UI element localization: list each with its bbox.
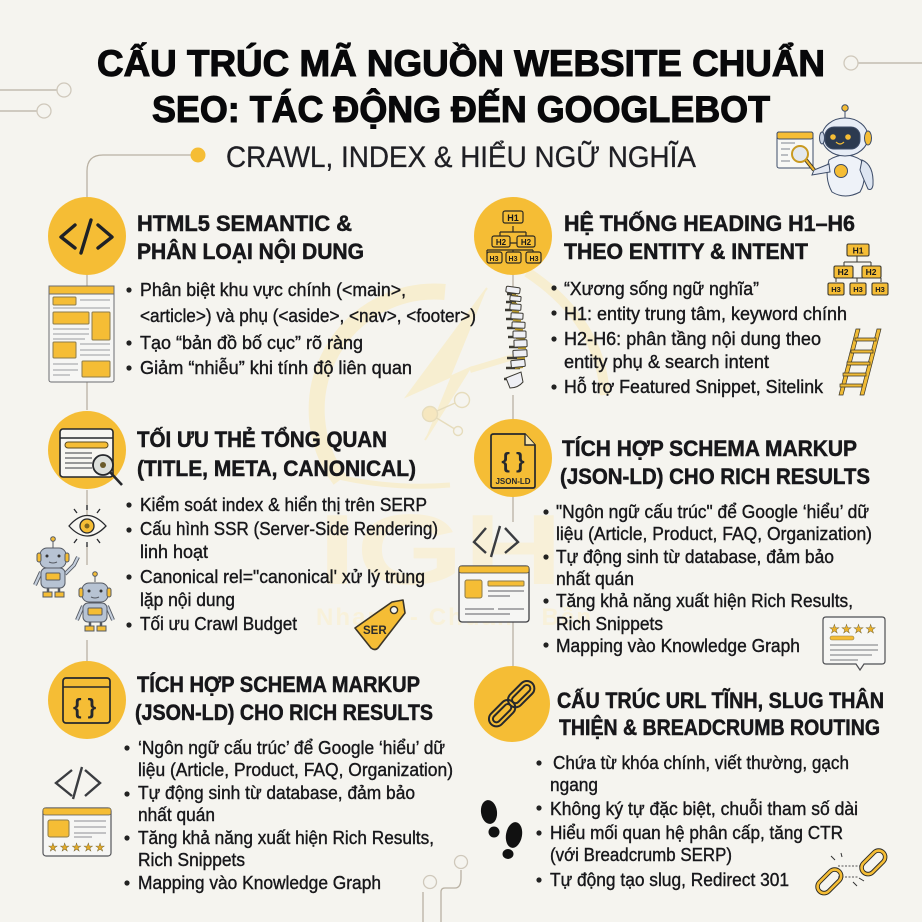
icon: heading tree small: H2 [838, 267, 849, 277]
icon: JSON-LD file circle [474, 419, 552, 497]
bullet list: (với Breadcrumb SERP) [550, 845, 732, 865]
panel: heading system [474, 197, 888, 397]
bullet list: ngang [550, 775, 598, 795]
heading: (JSON-LD) CHO RICH RESULTS [135, 700, 433, 725]
icon: heading tree circle [474, 197, 552, 275]
bullet list: liệu (Article, Product, FAQ, Organization) [556, 524, 872, 544]
icon: heading tree small: H3 [875, 285, 885, 294]
illustration: browser layout [459, 566, 529, 622]
illustration: review card [43, 808, 111, 856]
bullet list: nhất quán [556, 569, 634, 589]
title: CẤU TRÚC MÃ NGUỒN WEBSITE CHUẨN [97, 42, 825, 84]
bullet list: Tự động tạo slug, Redirect 301 [550, 870, 789, 890]
heading [135, 672, 433, 725]
icon: browser braces circle: { } [73, 694, 97, 719]
bullet list: Tạo “bản đồ bố cục” rõ ràng [140, 333, 363, 353]
icon: ladder [839, 329, 881, 395]
heading [564, 210, 855, 264]
icon: eye [69, 505, 106, 547]
heading: HỆ THỐNG HEADING H1–H6 [564, 210, 855, 236]
icon: heading tree small: H3 [853, 285, 863, 294]
bullet list [126, 280, 476, 378]
bullet list: Hiểu mối quan hệ phân cấp, tăng CTR [550, 823, 843, 843]
bullet list: H2-H6: phân tầng nội dung theo [564, 329, 821, 349]
heading: HTML5 SEMANTIC & [137, 211, 352, 236]
subtitle: CRAWL, INDEX & HIỂU NGỮ NGHĨA [226, 140, 696, 174]
bullet list [551, 279, 847, 397]
icon: code tag [474, 526, 518, 557]
bullet list: Không ký tự đặc biệt, chuỗi tham số dài [550, 798, 858, 819]
heading: TỐI ƯU THẺ TỔNG QUAN [137, 426, 387, 452]
icon: heading tree circle: H3 [509, 256, 518, 263]
icon: SER price tag: SER [363, 625, 387, 637]
icon: broken chain [815, 848, 888, 896]
icon: heading tree circle: H3 [490, 256, 499, 263]
bullet list: liệu (Article, Product, FAQ, Organization) [138, 760, 453, 780]
bullet list: ‘Ngôn ngữ cấu trúc’ để Google ‘hiểu’ dữ [138, 738, 445, 758]
bullet list: Mapping vào Knowledge Graph [556, 636, 800, 656]
heading: THIỆN & BREADCRUMB ROUTING [559, 715, 880, 740]
icon: browser with magnifier circle [48, 411, 126, 489]
bullet list [543, 502, 872, 656]
icon: robot with magnifier [777, 105, 873, 196]
watermark logo [316, 272, 605, 631]
heading: THEO ENTITY & INTENT [564, 239, 809, 264]
bullet list: “Xương sống ngữ nghĩa” [564, 279, 759, 299]
bullet list: lặp nội dung [140, 590, 235, 610]
icon: heading tree small: H2 [866, 267, 877, 277]
watermark logo: IGH [318, 494, 563, 606]
bullet list: Canonical rel="canonical' xử lý trùng [140, 567, 425, 587]
bullet list: Hỗ trợ Featured Snippet, Sitelink [564, 376, 824, 397]
icon: heading tree small [828, 244, 888, 295]
icon: review speech bubble [823, 617, 885, 670]
bullet list: Kiểm soát index & hiển thị trên SERP [140, 495, 427, 515]
bullet list: Tăng khả năng xuất hiện Rich Results, [556, 591, 853, 611]
icon: robot waving [35, 537, 78, 597]
bullet list: Giảm “nhiễu” khi tính độ liên quan [140, 357, 412, 378]
icon: SER price tag [355, 600, 405, 650]
icon: code tag [56, 767, 100, 799]
icon: heading tree circle: H2 [521, 238, 532, 247]
icon: heading tree circle: H2 [496, 238, 507, 247]
bullet list: Rich Snippets [138, 850, 245, 870]
heading: CẤU TRÚC URL TĨNH, SLUG THÂN [557, 688, 884, 713]
icon: spine [504, 286, 527, 388]
bullet list: Chứa từ khóa chính, viết thường, gạch [553, 753, 849, 773]
panel: HTML5 semantic [48, 197, 476, 382]
illustration: review card: ★★★★★ [48, 842, 105, 854]
bullet list [126, 495, 438, 634]
icon: code tag circle [48, 197, 126, 275]
icon: JSON-LD file circle: JSON-LD [495, 477, 531, 486]
heading: (JSON-LD) CHO RICH RESULTS [560, 464, 870, 489]
panel: schema markup right [459, 419, 885, 670]
icon: robot standing [77, 572, 113, 631]
bullet list: <article>) và phụ (<aside>, <nav>, <footer>) [140, 306, 476, 326]
icon: chain link circle [474, 666, 550, 742]
bullet list: entity phụ & search intent [564, 352, 769, 372]
bullet list: Tối ưu Crawl Budget [140, 614, 297, 634]
bullet list: "Ngôn ngữ cấu trúc" để Google ‘hiểu’ dữ [556, 502, 869, 522]
bullet list: Tăng khả năng xuất hiện Rich Results, [138, 828, 434, 848]
icon: footprints [479, 799, 524, 859]
heading: (TITLE, META, CANONICAL) [137, 456, 416, 481]
bullet list: Rich Snippets [556, 614, 663, 634]
bullet list [536, 753, 858, 890]
panel: schema markup left [43, 661, 453, 893]
bullet list: Phân biệt khu vực chính (<main>, [140, 280, 406, 300]
heading: TÍCH HỢP SCHEMA MARKUP [562, 436, 857, 461]
heading: TÍCH HỢP SCHEMA MARKUP [137, 672, 420, 697]
icon: JSON-LD file circle: { } [501, 448, 525, 473]
panel: overview tags [35, 411, 438, 650]
watermark logo: Nhanh - Chuẩn - Bền [316, 604, 591, 631]
icon: heading tree small: H1 [853, 246, 864, 256]
icon: browser braces circle [48, 661, 126, 739]
bullet list: Tự động sinh từ database, đảm bảo [556, 547, 834, 567]
title: SEO: TÁC ĐỘNG ĐẾN GOOGLEBOT [152, 88, 770, 130]
heading [137, 426, 416, 481]
bullet list: Tự động sinh từ database, đảm bảo [138, 783, 415, 803]
bullet list: Cấu hình SSR (Server-Side Rendering) [140, 519, 438, 539]
title [97, 42, 825, 130]
bullet list: linh hoạt [140, 542, 208, 562]
bullet list: H1: entity trung tâm, keyword chính [564, 304, 847, 324]
heading [557, 688, 884, 740]
bullet list [124, 738, 453, 893]
bullet list: Mapping vào Knowledge Graph [138, 873, 381, 893]
icon: review speech bubble: ★★★★ [829, 622, 876, 636]
panel: URL structure [474, 666, 888, 896]
heading [137, 211, 364, 264]
bullet list: nhất quán [138, 805, 215, 825]
heading [560, 436, 870, 489]
heading: PHÂN LOẠI NỘI DUNG [137, 239, 364, 264]
illustration: page layout [49, 286, 114, 382]
icon: heading tree small: H3 [831, 285, 841, 294]
icon: heading tree circle: H1 [507, 213, 519, 223]
icon: heading tree circle: H3 [530, 256, 539, 263]
